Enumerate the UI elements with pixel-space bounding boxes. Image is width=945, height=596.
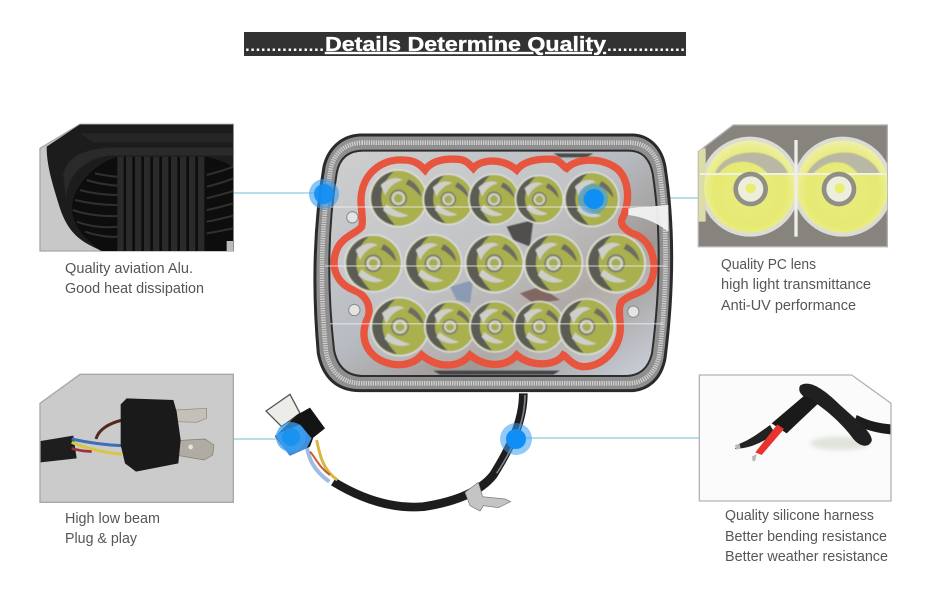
caption: heat sink <box>65 261 204 297</box>
panel: H4 plug photo <box>40 374 233 502</box>
title banner: ............... <box>245 36 324 55</box>
lens seams and glare <box>325 205 668 324</box>
panel: PC lens photo <box>698 125 893 247</box>
red halo ring <box>334 159 654 367</box>
caption: PC lens: high light transmittance <box>721 277 871 293</box>
caption: PC lens: Anti-UV performance <box>721 298 856 314</box>
caption: PC lens: Quality PC lens <box>721 257 816 273</box>
hotspot: heat sink <box>309 179 339 209</box>
LED array <box>344 169 646 357</box>
title banner: ............... <box>607 36 685 55</box>
caption: silicone harness: Quality silicone harness <box>725 508 874 524</box>
title banner <box>244 32 686 56</box>
hotspot: harness <box>500 423 532 455</box>
title banner: Details Determine Quality <box>325 34 607 56</box>
caption: heat sink: Good heat dissipation <box>65 281 204 297</box>
panel: silicone harness photo <box>699 375 891 501</box>
wire harness <box>266 393 525 511</box>
caption: H4 plug <box>65 511 160 547</box>
mounting screws <box>347 212 639 317</box>
lamp housing <box>315 135 672 391</box>
panel: heat sink photo <box>40 124 233 251</box>
hotspot: lens <box>578 184 608 214</box>
caption: heat sink: Quality aviation Alu. <box>65 261 193 277</box>
caption: silicone harness: Better bending resistance <box>725 529 887 545</box>
caption: silicone harness <box>725 508 888 565</box>
headlight <box>315 135 672 391</box>
connector lines <box>233 193 699 439</box>
caption: silicone harness: Better weather resistance <box>725 549 888 565</box>
caption: H4 plug: High low beam <box>65 511 160 527</box>
caption: PC lens <box>721 257 871 314</box>
caption: H4 plug: Plug & play <box>65 531 138 547</box>
hotspot: plug <box>276 422 306 452</box>
chrome reflections <box>433 153 593 375</box>
